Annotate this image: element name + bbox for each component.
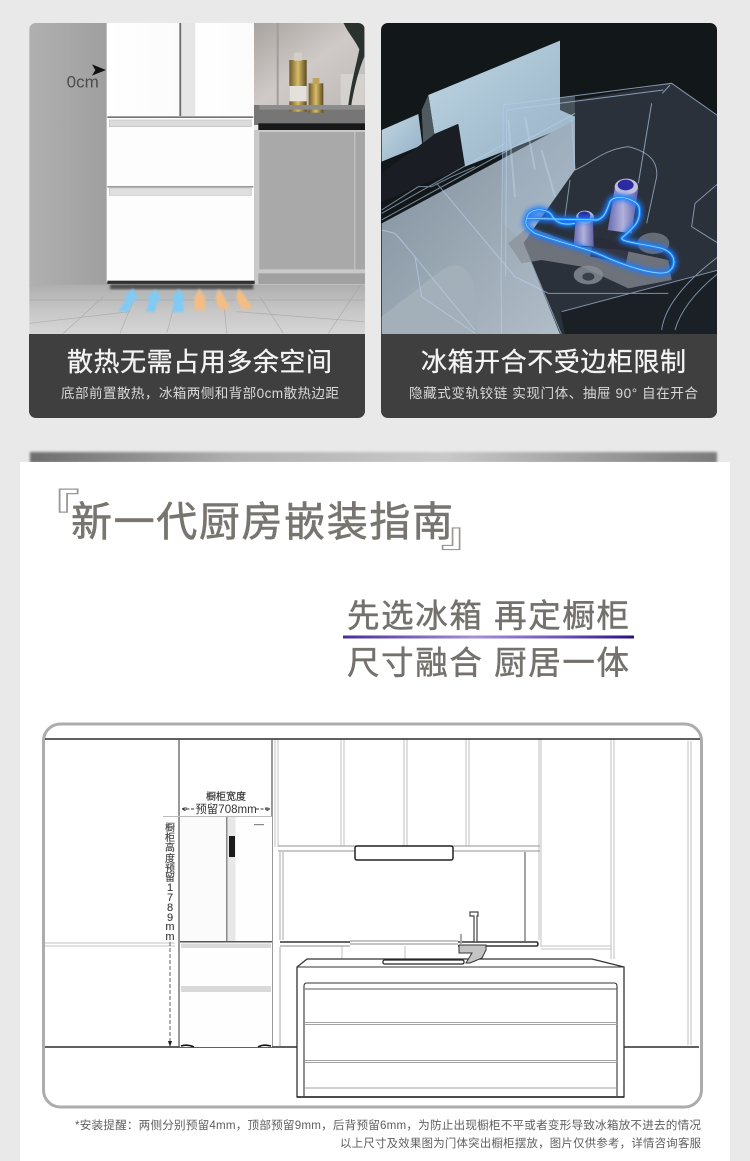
metal tray bbox=[508, 227, 672, 288]
slogan bbox=[343, 598, 634, 681]
width value: 预留708mm bbox=[195, 803, 257, 816]
footnote line 1: *安装提醒：两侧分别预留4mm，顶部预留9mm，后背预留6mm，为防止出现橱柜不平或者变形导致冰箱放不进去的情况 bbox=[75, 1118, 701, 1132]
airflow arrows bbox=[119, 289, 252, 312]
footnote line 2: 以上尺寸及效果图为门体突出橱柜摆放，图片仅供参考，详情咨询客服 bbox=[340, 1136, 702, 1150]
back counter bbox=[280, 941, 538, 946]
height value: 1 bbox=[167, 882, 173, 894]
shadow above white panel bbox=[30, 452, 717, 463]
purple divider bbox=[343, 636, 634, 638]
panel: kitchen guide bbox=[20, 462, 730, 1161]
height value: 7 bbox=[167, 892, 173, 904]
structure lines bbox=[45, 739, 700, 1047]
closing bracket: 』 bbox=[440, 517, 491, 555]
caption bar bbox=[381, 334, 717, 418]
panel: hinge bbox=[380, 20, 718, 418]
rounded frame bbox=[44, 724, 702, 1107]
refrigerator illustration bbox=[163, 816, 272, 1047]
neon blue track bbox=[526, 197, 674, 273]
width label: 橱柜宽度 bbox=[206, 790, 246, 803]
caption description: 底部前置散热，冰箱两侧和背部0cm散热边距 bbox=[61, 385, 339, 401]
text: 0cm marker: 0cm bbox=[67, 72, 99, 91]
sink and faucet bbox=[383, 912, 486, 964]
photo: fridge in kitchen bbox=[29, 23, 367, 335]
height value: 高 bbox=[165, 841, 175, 854]
slogan line 1: 先选冰箱 再定橱柜 bbox=[347, 598, 629, 634]
text: 0cm marker bbox=[67, 64, 106, 88]
height value: 度 bbox=[165, 852, 175, 865]
illustration: hinge x-ray bbox=[380, 20, 718, 337]
range hood bbox=[355, 846, 453, 860]
caption heading: 散热无需占用多余空间 bbox=[67, 347, 332, 377]
height value: 8 bbox=[167, 902, 173, 914]
slogan line 2: 尺寸融合 厨居一体 bbox=[347, 645, 629, 681]
height value: 留 bbox=[165, 871, 175, 884]
opening bracket: 『 bbox=[26, 486, 80, 527]
height dimension bbox=[165, 821, 175, 1047]
fridge body bbox=[107, 23, 255, 289]
panel: heat dissipation bbox=[29, 23, 367, 418]
caption bar bbox=[29, 334, 365, 418]
title bbox=[26, 486, 491, 555]
height arrow bbox=[169, 942, 171, 1042]
caption description: 隐藏式变轨铰链 实现门体、抽屉 90° 自在开合 bbox=[409, 386, 698, 401]
footnote bbox=[75, 1118, 702, 1150]
width arrow bbox=[182, 807, 270, 811]
title text: 新一代厨房嵌装指南 bbox=[71, 499, 453, 545]
height value: 9 bbox=[167, 912, 173, 924]
light cabinet lines bbox=[45, 739, 691, 1046]
height value: 预 bbox=[165, 863, 175, 875]
height value: 柜 bbox=[165, 831, 175, 844]
height value: 橱 bbox=[165, 821, 175, 834]
kitchen island bbox=[297, 959, 624, 1097]
kitchen line drawing bbox=[44, 724, 702, 1107]
white background bbox=[20, 462, 730, 1161]
height value: m bbox=[165, 921, 175, 933]
caption heading: 冰箱开合不受边柜限制 bbox=[421, 347, 686, 377]
transparent box bbox=[382, 83, 718, 335]
height value: m bbox=[165, 931, 175, 943]
cylinders bbox=[574, 179, 638, 247]
width dimension bbox=[182, 790, 270, 816]
